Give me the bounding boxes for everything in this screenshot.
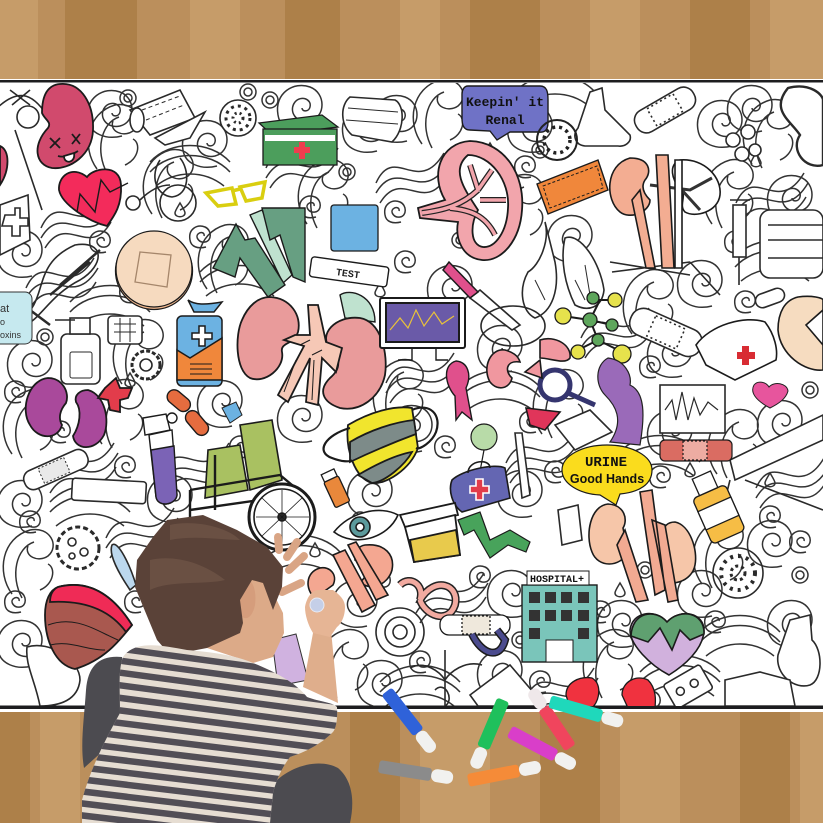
- icon: blue check badge: [222, 402, 242, 423]
- hair highlights: [150, 523, 240, 590]
- icon: clipboard: [470, 665, 545, 706]
- icon: pump bottle: [55, 318, 100, 384]
- poster sheet: [0, 79, 823, 712]
- icon: tube left: [71, 478, 146, 504]
- icon: pink ribbon: [446, 361, 472, 420]
- icon: green first-aid case: [259, 115, 338, 165]
- icon: thermometer: [515, 433, 530, 498]
- icon: rose knot: [376, 608, 424, 656]
- arm and drawing hand: [303, 590, 345, 703]
- marker: blue: [381, 687, 438, 755]
- icon: bandage bottom: [440, 615, 510, 635]
- icon: blue notebook: [331, 205, 378, 251]
- fingers on poster: [278, 537, 304, 592]
- icon: face mask outline: [343, 97, 402, 142]
- icon: top-right kidney outline: [781, 86, 823, 166]
- icon: gear left: [57, 527, 99, 569]
- marker: teal: [548, 695, 625, 729]
- icon: plate ellipse: [481, 306, 545, 346]
- icon: wheelchair: [190, 420, 315, 550]
- icon: green zigzag: [458, 512, 530, 558]
- kidneys: large central pair: [237, 297, 386, 409]
- note: cut-off toxins card: [0, 292, 32, 344]
- icon: red surgical mask: [45, 585, 132, 669]
- outlined doodle objects: [0, 83, 823, 709]
- boy colouring the poster: [70, 515, 360, 823]
- icon: urine cup: [400, 503, 460, 562]
- kidneys: purple pair with cross: [26, 378, 132, 447]
- icon: purple medic bag: [450, 462, 510, 512]
- icon: red plaster: [660, 440, 732, 461]
- icon: heart purple and green: [630, 614, 704, 675]
- icon: DNA helix: [32, 244, 101, 326]
- icon: virus under bubble: [537, 120, 577, 160]
- icon: orange capsules: [164, 387, 211, 438]
- marker: grey: [378, 760, 454, 785]
- icon: virus right: [713, 548, 763, 598]
- hair: [135, 515, 283, 655]
- icon: orange plaster: [537, 160, 608, 214]
- icon: tag: [558, 505, 582, 545]
- icon: test strip: TEST: [335, 268, 360, 282]
- icon: safety pin: [111, 544, 136, 590]
- icon: flask: [575, 88, 630, 146]
- markers: [378, 686, 625, 787]
- icon: pink lipstick tube: [470, 290, 520, 330]
- icon: pills cluster: [726, 125, 761, 161]
- note: cut-off toxins card: o: [0, 317, 5, 327]
- icon: lavender book: [272, 634, 308, 686]
- icon: navy hook: [472, 630, 505, 653]
- striped shirt: [70, 630, 360, 823]
- icon: virus: [220, 100, 256, 136]
- icon: monitor: [380, 298, 465, 360]
- icon: medicine bag: [177, 300, 222, 386]
- icon: gauze: [108, 316, 142, 344]
- icon: vial: [143, 414, 177, 504]
- icon: bandage strip left: [22, 448, 89, 490]
- note: cut-off toxins card: oxins: [0, 330, 22, 340]
- icon: pink-tan pretzel knot: [400, 581, 456, 616]
- marker: magenta: [507, 726, 578, 772]
- icon: round bandage: [116, 231, 192, 310]
- kidney: right edge cream: [778, 296, 823, 370]
- icon: red heart with pulse: [59, 169, 128, 226]
- icon: first-aid box outline: [0, 195, 30, 255]
- speech bubble: URINE Good Hands: Good Hands: [570, 472, 644, 486]
- icon: nurse cap: [696, 320, 777, 380]
- speech bubble: Keepin' it Renal: Keepin' it: [466, 95, 544, 110]
- icon: pink marker on plate: [443, 262, 478, 298]
- icon: test strip: [309, 257, 389, 322]
- kidneys: small salmon pair: [308, 542, 393, 612]
- marker: orange: [467, 760, 542, 787]
- icon: flask right: [778, 615, 820, 686]
- icon: green scrubs: [213, 208, 305, 297]
- icon: lollipop: [471, 424, 497, 482]
- icon: hospital building: [522, 571, 597, 662]
- icon: small orange bottle: [320, 468, 350, 508]
- icon: hospital building: HOSPITAL+: [530, 575, 584, 586]
- speech bubble: Keepin' it Renal: Renal: [485, 113, 525, 128]
- icon: organs with magnifier: [487, 339, 595, 430]
- icon: purple smoke swirl: [598, 358, 643, 445]
- icon: book: [555, 410, 612, 450]
- icon: bandage outline: [628, 308, 702, 358]
- ear: [238, 580, 255, 618]
- icon: scissors: [610, 262, 720, 295]
- marker: green: [468, 697, 509, 771]
- icon: pill case: [760, 210, 823, 278]
- neck and face: [207, 578, 284, 663]
- kidneys: bottom right pair: [589, 490, 696, 602]
- icon: red boxing kidneys: [566, 678, 655, 708]
- icon: crossed stick and knot: [0, 89, 43, 210]
- icon: molecule: [555, 292, 631, 363]
- icon: gear: [132, 351, 160, 379]
- speech bubble: URINE Good Hands: URINE: [585, 455, 627, 471]
- background doodles: [0, 66, 823, 718]
- note: cut-off toxins card: at: [0, 303, 9, 315]
- marker: red: [526, 686, 576, 751]
- trousers: [82, 657, 352, 823]
- icon: bandage outline top: [634, 86, 696, 134]
- icon: ECG chart: [660, 385, 725, 433]
- icon: coat: [725, 672, 795, 706]
- icon: yellow glasses: [206, 182, 265, 206]
- icon: caduceus: [410, 650, 482, 706]
- kidney cross-section: [418, 141, 522, 260]
- icon: capsule: [755, 288, 786, 308]
- kidney: dead cartoon kidney: [0, 84, 93, 185]
- icon: syringe: [730, 200, 750, 285]
- kidneys: top right pair: [610, 155, 720, 268]
- icon: striped yellow mask: [324, 407, 438, 483]
- icon: orange pill bottle: [685, 468, 745, 545]
- icon: lungs: [522, 222, 604, 318]
- speech bubble: Keepin' it Renal: [462, 86, 548, 140]
- icon: pink broken heart: [753, 382, 788, 408]
- icon: bandage roll: [130, 90, 205, 145]
- icon: eye: [334, 510, 398, 540]
- icon: hospital bed: [725, 415, 823, 510]
- icon: pills pack: [663, 664, 713, 709]
- icon: stethoscope: [126, 158, 196, 221]
- icon: bottom-left kidney: [27, 646, 80, 706]
- speech bubble: URINE Good Hands: [562, 445, 652, 505]
